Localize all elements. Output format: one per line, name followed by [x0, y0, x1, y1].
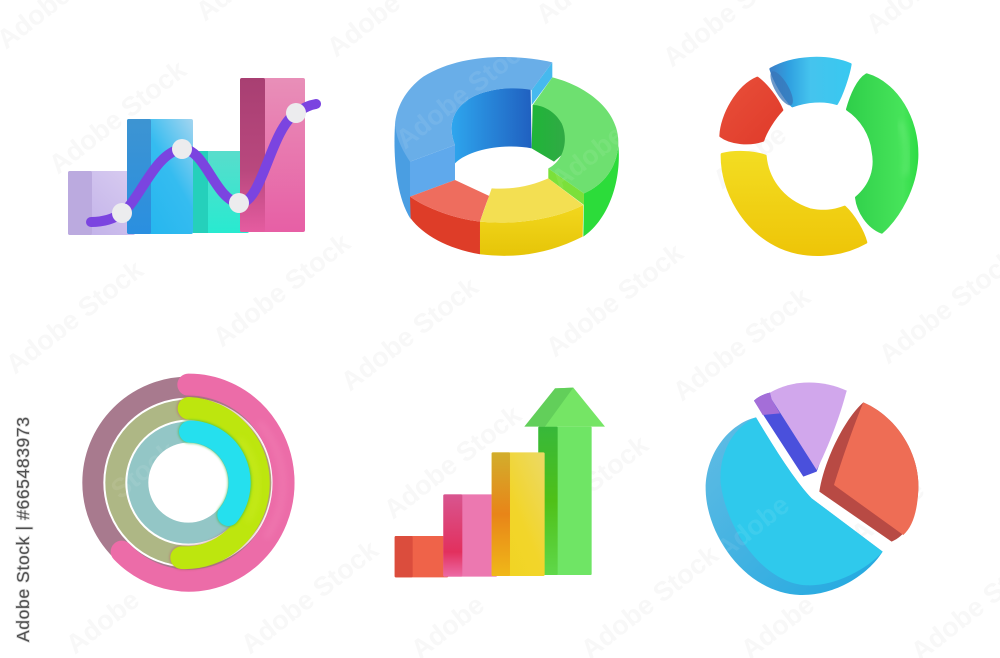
stock id vertical text: Adobe Stock | #665483973	[13, 417, 33, 642]
muted ring tracks	[94, 388, 283, 577]
cyan arc	[190, 432, 240, 515]
blue segment	[394, 57, 552, 219]
purple trend line	[91, 104, 316, 222]
yellow tube	[722, 152, 866, 255]
icon: exploded pie chart	[706, 382, 918, 595]
yellow bar	[492, 452, 545, 576]
watermark background: Adobe Stock	[207, 227, 357, 353]
lime arc	[182, 408, 258, 558]
data points	[112, 103, 306, 223]
watermark background: Adobe	[845, 474, 930, 550]
pink arc	[122, 385, 284, 581]
icon: 3D donut chart	[394, 57, 619, 256]
yellow segment	[480, 178, 583, 256]
watermark overlay on icons	[105, 29, 795, 565]
watermark overlay on icons: Adobe Stock	[390, 29, 540, 155]
watermark background: Adobe Stock	[235, 534, 385, 658]
watermark background: Adobe	[707, 119, 792, 195]
red bar	[395, 536, 448, 577]
red segment	[410, 180, 489, 254]
green tube	[847, 75, 917, 232]
blue bar	[127, 119, 193, 234]
icon: radial progress rings	[94, 385, 284, 581]
teal bar	[193, 151, 249, 233]
red tube	[721, 78, 782, 143]
watermark background: Adobe Stock	[378, 399, 528, 525]
watermark overlay on icons: Stock	[105, 435, 182, 505]
blue tube	[766, 58, 850, 108]
green segment	[532, 77, 619, 237]
watermark background: Adobe	[60, 584, 145, 658]
red slice	[819, 402, 918, 542]
watermark overlay on icons: Adobe	[710, 489, 795, 565]
watermark overlay on icons: Adobe	[545, 119, 630, 195]
watermark background: Adobe Stock	[505, 429, 655, 555]
icon: tube ring chart	[721, 58, 917, 255]
pink bar	[443, 494, 497, 577]
purple slice	[754, 382, 847, 477]
watermark background: Adobe Stock	[0, 254, 150, 380]
icon: growth bars with arrow	[395, 388, 605, 577]
watermark background: Adobe Stock	[335, 271, 485, 397]
watermark background: Adobe Stock	[43, 54, 193, 180]
blue slice	[706, 417, 883, 595]
green arrow	[524, 388, 605, 575]
icon: bar chart with trend line	[68, 78, 316, 235]
pink bar	[240, 78, 305, 232]
watermark background: Adobe Stock	[667, 281, 817, 407]
lilac bar	[68, 171, 135, 235]
watermark background: Adobe Stock	[540, 237, 690, 363]
